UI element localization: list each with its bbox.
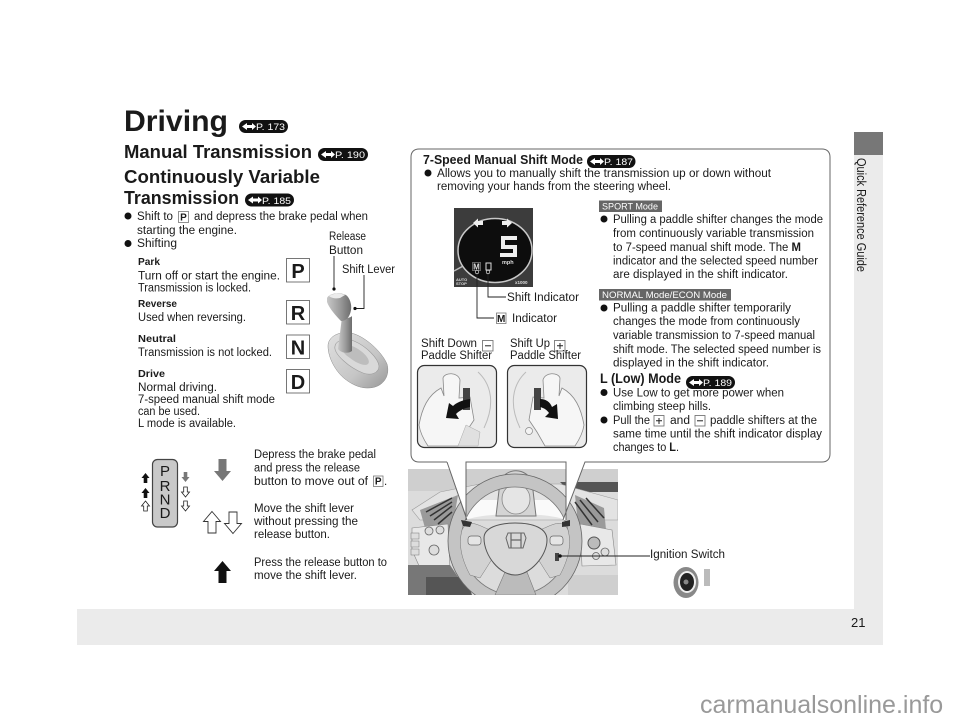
legend text: move lever: Move the shift lever	[254, 503, 354, 515]
illustration: instrument cluster: AUTO	[456, 277, 467, 282]
heading: continuously variable transmission: Continuously Variable	[124, 166, 320, 187]
gear: neutral: Transmission is not locked.	[138, 347, 272, 359]
legend arrow: gray down	[214, 459, 231, 481]
gear: park	[138, 256, 310, 294]
title	[124, 105, 288, 138]
legend text: move lever: without pressing the	[253, 516, 358, 528]
gear: reverse: Reverse	[138, 298, 177, 310]
label: M indicator: Indicator	[512, 313, 557, 325]
legend text: press release: move the shift lever.	[254, 570, 357, 582]
text: low mode description: Use Low to get more power when	[613, 388, 784, 400]
sidebar: section tab	[854, 132, 883, 609]
legend text: brake and release: .	[384, 476, 387, 488]
footer band	[77, 609, 883, 645]
heading: continuously variable transmission: P. 185	[262, 196, 291, 207]
shift pattern: PRND plate with arrows	[142, 460, 190, 527]
shift pattern: PRND plate with arrows: N	[160, 492, 170, 508]
gear: park: Transmission is locked.	[138, 282, 251, 294]
legend arrow: black up	[214, 561, 231, 583]
panel: 7-speed manual shift mode	[411, 149, 830, 520]
legend text: brake and release: P	[375, 476, 382, 488]
title: P. 173	[256, 122, 285, 133]
label: shift down paddle shifter	[421, 338, 493, 362]
shift pattern: PRND plate with arrows: R	[160, 478, 171, 495]
legend arrow: white up	[204, 512, 220, 533]
label: release button	[329, 231, 366, 291]
text: normal mode description: shift mode. The selected speed number is	[613, 344, 821, 356]
bullets: shift instructions: and depress the brake pedal when	[194, 211, 368, 223]
gear: reverse	[138, 298, 310, 325]
legend text: brake and release	[254, 449, 387, 488]
illustration: ignition switch button	[674, 567, 710, 598]
watermark: carmanualsonline.info	[700, 691, 943, 719]
gear: reverse: R	[291, 303, 306, 325]
gear: reverse: Used when reversing.	[138, 312, 246, 324]
illustration: left paddle shifter	[418, 366, 496, 448]
bullets: shift instructions: Shift to	[137, 211, 173, 223]
text: sport mode description: to 7-speed manual shift mode. The M	[613, 242, 801, 254]
label: ignition switch: Ignition Switch	[650, 549, 725, 561]
sidebar: section tab: Quick Reference Guide	[854, 158, 868, 272]
legend text: move lever: release button.	[254, 529, 330, 541]
text: low mode description: and	[670, 415, 690, 427]
text: normal mode description: changes the mode from continuously	[613, 316, 800, 328]
label: shift lever: Shift Lever	[342, 264, 395, 276]
label: shift up paddle shifter: Paddle Shifter	[510, 350, 581, 362]
bullets: shift instructions: Shifting	[137, 238, 177, 250]
text: low mode description: climbing steep hills.	[613, 401, 711, 413]
text: manual shift description	[424, 168, 772, 193]
label: shift indicator: Shift Indicator	[507, 292, 579, 304]
gear: drive	[138, 368, 310, 430]
heading: continuously variable transmission: Transmission	[124, 187, 239, 208]
panel heading: 7-speed manual shift mode: 7-Speed Manual Shift Mode	[423, 153, 583, 167]
text: low mode description	[600, 388, 822, 454]
panel heading: 7-speed manual shift mode: P. 187	[604, 157, 633, 168]
heading: L low mode	[600, 371, 735, 389]
gear: park: Turn off or start the engine.	[138, 270, 280, 282]
label: shift up paddle shifter	[510, 338, 581, 362]
tag: normal and econ mode: NORMAL Mode/ECON Mode	[602, 290, 727, 301]
text: normal mode description: variable transmission to 7-speed manual	[613, 330, 815, 342]
text: low mode description: Pull the	[613, 415, 650, 427]
gear: drive: Normal driving.	[138, 382, 217, 394]
illustration: dashboard and steering wheel	[408, 469, 618, 608]
illustration: instrument cluster: mph	[502, 260, 514, 266]
legend text: press release	[254, 557, 387, 582]
bullets: shift instructions	[124, 211, 368, 250]
text: sport mode description: Pulling a paddle shifter changes the mode	[613, 214, 823, 226]
text: sport mode description	[600, 214, 823, 281]
gear: neutral: N	[291, 338, 305, 360]
legend text: press release: Press the release button to	[254, 557, 387, 569]
legend text: move lever	[253, 503, 358, 541]
illustration: instrument cluster: M	[473, 262, 480, 272]
page number: 21	[851, 615, 865, 630]
illustration: instrument cluster: x1000	[515, 280, 528, 285]
label: shift down paddle shifter: Shift Down	[421, 338, 477, 350]
gear: neutral	[138, 333, 310, 360]
shift pattern: PRND plate with arrows: P	[160, 463, 170, 480]
bullets: shift instructions: starting the engine.	[137, 225, 237, 237]
heading: L low mode: L (Low) Mode	[600, 371, 681, 386]
text: low mode description: same time until the shift indicator display	[613, 428, 822, 440]
gear: park: Park	[138, 256, 160, 268]
bullets: shift instructions: P	[180, 212, 187, 224]
illustration: instrument cluster: STOP	[456, 281, 467, 286]
label: shift indicator	[486, 270, 579, 304]
legend arrow: white down	[224, 512, 242, 534]
text: low mode description: paddle shifters at the	[710, 415, 817, 427]
gear: drive: Drive	[138, 368, 165, 380]
label: release button: Release	[329, 231, 366, 243]
label: release button: Button	[329, 245, 363, 257]
label: shift up paddle shifter: Shift Up	[510, 338, 550, 350]
legend text: brake and release: button to move out of	[254, 476, 369, 488]
text: manual shift description: removing your hands from the steering wheel.	[437, 181, 671, 193]
gear: drive: can be used.	[138, 406, 200, 418]
shift pattern: PRND plate with arrows: D	[160, 505, 171, 522]
legend text: brake and release: and press the release	[254, 462, 360, 474]
text: normal mode description: displayed in the shift indicator.	[613, 358, 769, 370]
label: M indicator	[475, 270, 557, 325]
text: normal mode description: Pulling a paddle shifter temporarily	[613, 302, 791, 314]
title: Driving	[124, 105, 228, 138]
text: low mode description: changes to L.	[613, 442, 679, 454]
gear: drive: D	[291, 372, 305, 394]
legend text: brake and release: Depress the brake pedal	[254, 449, 376, 461]
text: sport mode description: from continuously variable transmission	[613, 228, 814, 240]
gear: drive: 7-speed manual shift mode	[138, 394, 275, 406]
text: normal mode description	[600, 302, 821, 370]
text: sport mode description: indicator and the selected speed number	[613, 256, 818, 268]
gear: neutral: Neutral	[138, 333, 176, 345]
heading: L low mode: P. 189	[703, 378, 732, 389]
label: shift down paddle shifter: Paddle Shifter	[421, 350, 492, 362]
gear: park: P	[291, 261, 305, 283]
heading: continuously variable transmission	[124, 166, 320, 208]
text: manual shift description: Allows you to manually shift the transmission up or down without	[437, 168, 772, 180]
illustration: instrument cluster	[454, 208, 533, 287]
heading: manual transmission: Manual Transmission	[124, 141, 312, 162]
label: shift lever	[342, 264, 395, 310]
illustration: right paddle shifter	[508, 366, 586, 448]
label: M indicator: M	[497, 314, 505, 325]
tag: sport mode: SPORT Mode	[602, 202, 658, 212]
label: ignition switch	[558, 549, 725, 561]
text: sport mode description: are displayed in the shift indicator.	[613, 269, 788, 281]
heading: manual transmission: P. 190	[335, 150, 365, 161]
gear: drive: L mode is available.	[138, 418, 236, 430]
illustration: shift lever	[327, 293, 388, 388]
